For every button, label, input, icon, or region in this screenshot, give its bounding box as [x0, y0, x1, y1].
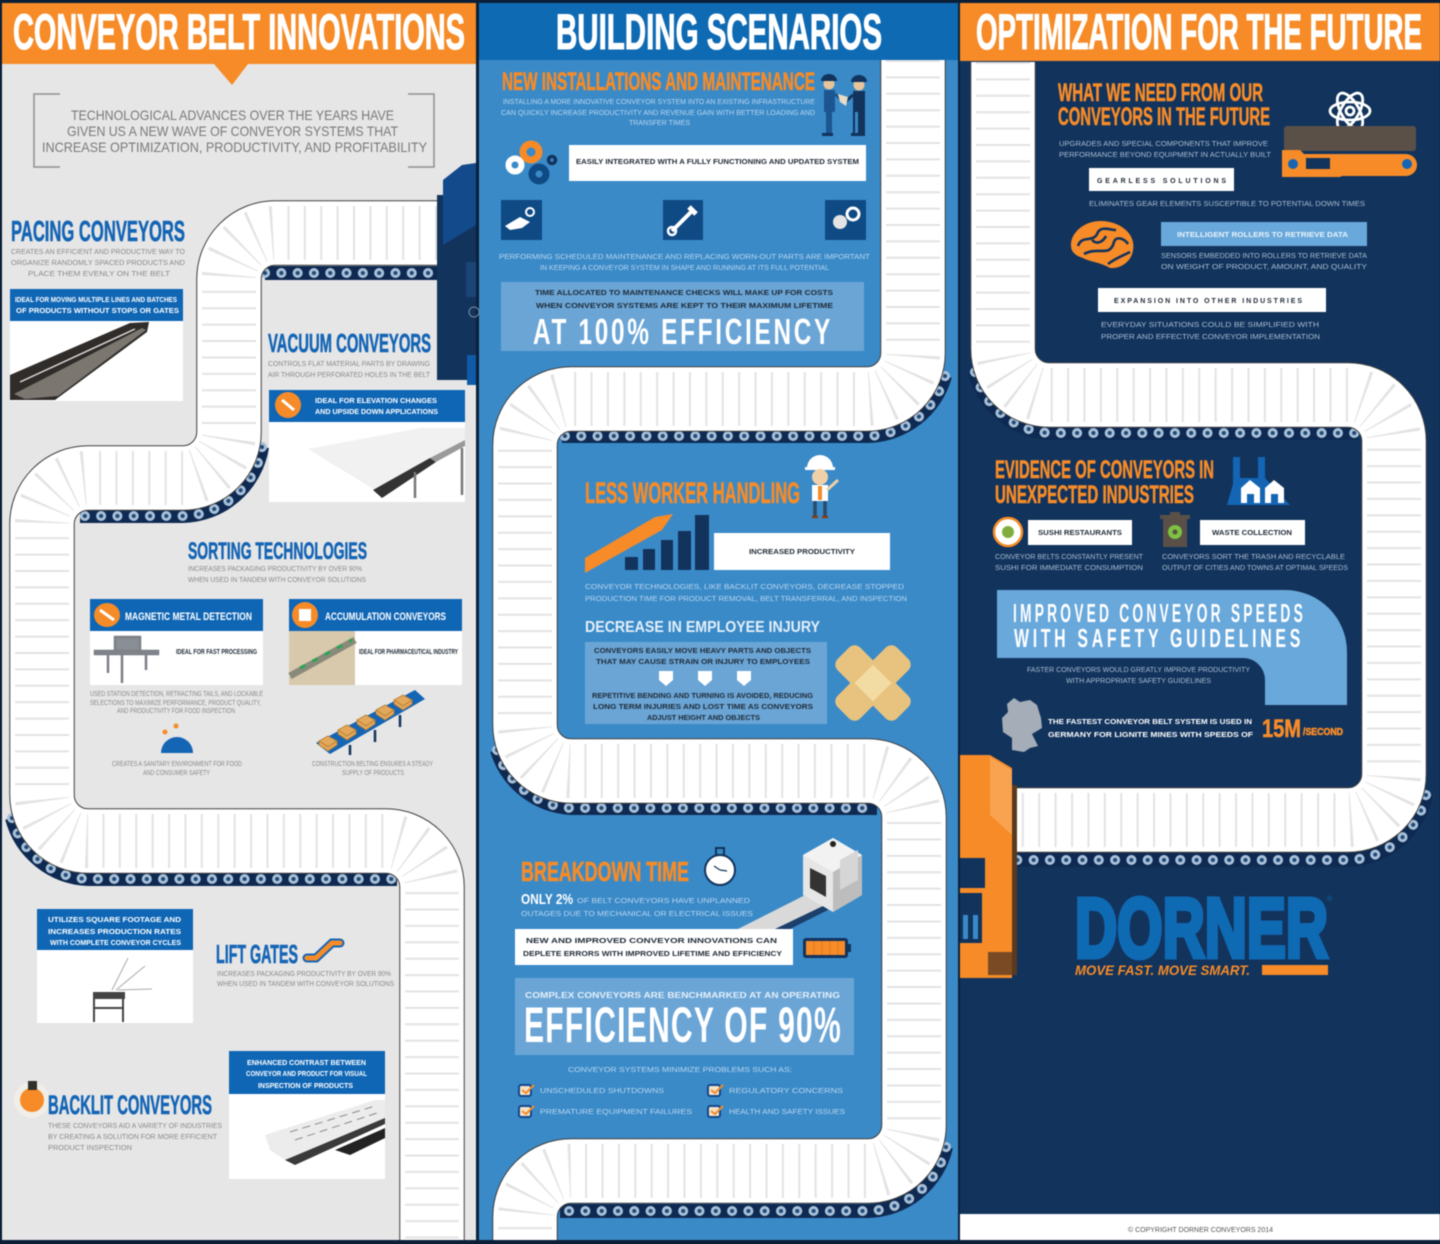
icon: oil can: [501, 200, 542, 240]
section: breakdown time: OF BELT CONVEYORS HAVE UNPLANNED: [577, 898, 750, 905]
text: sanitary caption: AND CONSUMER SAFETY: [143, 770, 210, 777]
callout: injury box: LONG TERM INJURIES AND LOST TIME AS CONVEYORS: [593, 704, 813, 711]
text: belting caption: CONSTRUCTION BELTING ENSURES A STEADY: [312, 761, 433, 768]
icon: sushi plate: [994, 518, 1022, 546]
image: pacing conveyor belt: [10, 322, 149, 400]
card: accumulation conveyors: IDEAL FOR PHARMACEUTICAL INDUSTRY: [359, 649, 458, 656]
chart: productivity bars with arrow: [585, 514, 709, 573]
section: new installations and maintenance: PERFORMING SCHEDULED MAINTENANCE AND REPLACING WORN-OUT PARTS ARE IMPORTANT: [499, 254, 871, 261]
section: sorting technologies: [90, 538, 462, 777]
section: vacuum conveyors: IDEAL FOR ELEVATION CHANGES: [315, 398, 437, 405]
section: lift gates: INCREASES PACKAGING PRODUCTIVITY BY OVER 90%: [217, 971, 391, 978]
callout: 100% efficiency: WHEN CONVEYOR SYSTEMS ARE KEPT TO THEIR MAXIMUM LIFETIME: [536, 303, 833, 310]
footer: copyright: [960, 1214, 1440, 1240]
logo: dorner: MOVE FAST. MOVE SMART.: [1075, 962, 1250, 978]
callout: 100% efficiency: [501, 282, 864, 352]
section: what we need from our conveyors: SENSORS EMBEDDED INTO ROLLERS TO RETRIEVE DATA: [1161, 253, 1367, 260]
callout: injury box: ADJUST HEIGHT AND OBJECTS: [647, 715, 760, 722]
intro bracketed text: INCREASE OPTIMIZATION, PRODUCTIVITY, AND PROFITABILITY: [42, 139, 428, 155]
text: sanitary caption: CREATES A SANITARY ENVIRONMENT FOR FOOD: [112, 761, 242, 768]
icon: atom: [1330, 89, 1370, 133]
callout: sushi restaurants: SUSHI RESTAURANTS: [1038, 530, 1122, 537]
section: what we need from our conveyors: PROPER AND EFFECTIVE CONVEYOR IMPLEMENTATION: [1101, 334, 1320, 341]
section: what we need from our conveyors: PERFORMANCE BEYOND EQUIPMENT IN ACTUALLY BUILT: [1059, 152, 1272, 159]
callout: injury box: CONVEYORS EASILY MOVE HEAVY PARTS AND OBJECTS: [594, 648, 811, 655]
callout: new and improved innovations: [515, 929, 793, 965]
callout: injury box: [585, 642, 827, 724]
icon: orange conveyor device: [1282, 126, 1417, 177]
conveyor belt: panel 1: [12, 233, 437, 1240]
icon: recycling bin: [1160, 512, 1190, 547]
section: lift gates: INCREASES PRODUCTION RATES: [48, 929, 181, 936]
section: less worker handling: LESS WORKER HANDLING: [585, 477, 800, 510]
callout: gearless solutions: GEARLESS SOLUTIONS: [1097, 178, 1226, 185]
section: backlit conveyors: BY CREATING A SOLUTION FOR MORE EFFICIENT: [48, 1134, 218, 1141]
callout: waste collection: [1200, 520, 1305, 545]
icon: machine gears: [825, 200, 866, 240]
section: vacuum conveyors: [268, 328, 465, 502]
section: backlit conveyors: [14, 1051, 385, 1179]
fact: fastest belt in germany: /SECOND: [1303, 727, 1343, 738]
footer: copyright: © COPYRIGHT DORNER CONVEYORS 2014: [1128, 1226, 1273, 1234]
header: conveyor belt innovations: [2, 3, 476, 85]
section: what we need from our conveyors: EVERYDAY SITUATIONS COULD BE SIMPLIFIED WITH: [1101, 322, 1319, 329]
section: new installations and maintenance: [499, 68, 871, 352]
callout: gearless solutions: [1089, 168, 1234, 191]
section: lift gates: WITH COMPLETE CONVEYOR CYCLES: [50, 940, 181, 947]
icon: light bulb: [14, 1081, 50, 1118]
card: magnetic metal detection: MAGNETIC METAL DETECTION: [125, 611, 252, 623]
section: unexpected industries: CONVEYOR BELTS CONSTANTLY PRESENT: [995, 554, 1144, 561]
section: pacing conveyors: PLACE THEM EVENLY ON THE BELT: [28, 271, 171, 278]
intro bracketed text: TECHNOLOGICAL ADVANCES OVER THE YEARS HAVE: [71, 107, 394, 123]
icon: sanitary dome: [161, 724, 193, 753]
panel: optimization for the future: FASTER CONVEYORS WOULD GREATLY IMPROVE PRODUCTIVITY: [1027, 667, 1250, 674]
section: what we need from our conveyors: WHAT WE NEED FROM OUR: [1058, 79, 1263, 107]
section: what we need from our conveyors: ON WEIGHT OF PRODUCT, AMOUNT, AND QUALITY: [1161, 264, 1367, 271]
section: unexpected industries: EVIDENCE OF CONVEYORS IN: [995, 456, 1214, 484]
section: new installations and maintenance: NEW INSTALLATIONS AND MAINTENANCE: [502, 68, 815, 96]
icon: brain: [1071, 221, 1133, 268]
image: vacuum conveyor: [308, 428, 465, 498]
section: lift gates: WHEN USED IN TANDEM WITH CONVEYOR SOLUTIONS: [217, 981, 394, 988]
fact: fastest belt in germany: 15M: [1262, 715, 1301, 743]
text: detection description: AND PRODUCTIVITY FOR FOOD INSPECTION: [117, 708, 235, 715]
section: sorting technologies: WHEN USED IN TANDEM WITH CONVEYOR SOLUTIONS: [188, 577, 366, 584]
section: breakdown time: OUTAGES DUE TO MECHANICAL OR ELECTRICAL ISSUES: [521, 911, 753, 918]
callout: new and improved innovations: NEW AND IMPROVED CONVEYOR INNOVATIONS CAN: [526, 938, 777, 945]
card: magnetic metal detection: IDEAL FOR FAST PROCESSING: [176, 649, 257, 656]
section: vacuum conveyors: VACUUM CONVEYORS: [268, 328, 431, 358]
section: what we need from our conveyors: ELIMINATES GEAR ELEMENTS SUSCEPTIBLE TO POTENTIAL DOWN TIMES: [1089, 201, 1365, 208]
section: backlit conveyors: ENHANCED CONTRAST BETWEEN: [247, 1060, 366, 1067]
checklist: problems minimized: PREMATURE EQUIPMENT FAILURES: [540, 1109, 692, 1116]
callout: efficiency of 90%: EFFICIENCY OF 90%: [524, 997, 842, 1053]
section: new installations and maintenance: INSTALLING A MORE INNOVATIVE CONVEYOR SYSTEM INTO AN EXISTING INFRASTRUCTURE: [503, 99, 815, 106]
logo: dorner: [1075, 881, 1333, 978]
section: unexpected industries: SUSHI FOR IMMEDIATE CONSUMPTION: [995, 565, 1143, 572]
icon: bandage cross: [832, 642, 914, 724]
callout: efficiency of 90%: COMPLEX CONVEYORS ARE BENCHMARKED AT AN OPERATING: [525, 990, 840, 1000]
icon: stopwatch: [705, 848, 735, 885]
icon: escalator: [307, 943, 340, 958]
callout: intelligent rollers: INTELLIGENT ROLLERS TO RETRIEVE DATA: [1177, 230, 1349, 239]
section: breakdown time: CONVEYOR SYSTEMS MINIMIZE PROBLEMS SUCH AS:: [568, 1067, 792, 1074]
section: lift gates: LIFT GATES: [216, 939, 298, 969]
section: vacuum conveyors: AND UPSIDE DOWN APPLICATIONS: [315, 409, 438, 416]
callout: easily integrated: EASILY INTEGRATED WITH A FULLY FUNCTIONING AND UPDATED SYSTEM: [576, 159, 859, 166]
section: pacing conveyors: PACING CONVEYORS: [11, 216, 185, 248]
section: less worker handling: [585, 455, 914, 724]
section: backlit conveyors: CONVEYOR AND PRODUCT FOR VISUAL: [246, 1071, 368, 1078]
section: lift gates: [37, 909, 394, 1023]
callout: waste collection: WASTE COLLECTION: [1212, 530, 1292, 537]
section: backlit conveyors: PRODUCT INSPECTION: [48, 1145, 132, 1152]
card: accumulation conveyors: [289, 599, 462, 685]
checklist: problems minimized: HEALTH AND SAFETY ISSUES: [729, 1109, 845, 1116]
icon: map of germany: [1002, 698, 1042, 752]
callout: injury box: THAT MAY CAUSE STRAIN OR INJURY TO EMPLOYEES: [596, 659, 810, 666]
callout: increased productivity: [714, 533, 890, 570]
card: accumulation conveyors: ACCUMULATION CONVEYORS: [325, 611, 446, 623]
icon: conveyor with boxes: [316, 690, 425, 755]
icon: two workers: [821, 74, 867, 136]
section: unexpected industries: CONVEYORS SORT THE TRASH AND RECYCLABLE: [1162, 554, 1345, 561]
section: less worker handling: CONVEYOR TECHNOLOGIES, LIKE BACKLIT CONVEYORS, DECREASE STOPPED: [585, 584, 904, 591]
intro bracketed text: [34, 94, 434, 167]
icon: engineer with hard hat: [805, 455, 838, 517]
header: building scenarios: [479, 3, 958, 60]
intro bracketed text: GIVEN US A NEW WAVE OF CONVEYOR SYSTEMS THAT: [67, 123, 398, 139]
callout: easily integrated: [569, 145, 866, 181]
text: detection description: USED STATION DETECTION, RETRACTING TAILS, AND LOCKABLE: [90, 691, 263, 698]
callout: intelligent rollers: [1161, 222, 1367, 246]
image: lift gate: [94, 958, 152, 1022]
icon: gears: [508, 144, 556, 181]
callout: sushi restaurants: [1028, 520, 1132, 545]
icon: wrench: [663, 200, 703, 240]
text: detection description: SELECTIONS TO MAXIMIZE PERFORMANCE, PRODUCT QUALITY,: [90, 700, 261, 707]
section: backlit conveyors: INSPECTION OF PRODUCTS: [258, 1083, 353, 1090]
illustration: inspection machine: [738, 838, 862, 929]
section: lift gates: UTILIZES SQUARE FOOTAGE AND: [48, 917, 181, 924]
section: breakdown time: BREAKDOWN TIME: [521, 856, 689, 887]
section: backlit conveyors: THESE CONVEYORS AID A VARIETY OF INDUSTRIES: [48, 1123, 222, 1130]
section: breakdown time: ONLY 2%: [521, 891, 573, 908]
section: pacing conveyors: OF PRODUCTS WITHOUT STOPS OR GATES: [16, 308, 179, 315]
callout: new and improved innovations: DEPLETE ERRORS WITH IMPROVED LIFETIME AND EFFICIENCY: [523, 951, 782, 958]
panel: conveyor belt innovations: [2, 3, 479, 1240]
panel: optimization for the future: WITH APPROPRIATE SAFETY GUIDELINES: [1066, 678, 1211, 685]
section: unexpected industries: [994, 456, 1348, 572]
section: less worker handling: DECREASE IN EMPLOYEE INJURY: [585, 619, 820, 636]
conveyor belt: panel 3: [975, 62, 1426, 860]
callout: expansion into other industries: [1098, 288, 1326, 312]
machine: blue conveyor housing: [437, 163, 479, 385]
section: what we need from our conveyors: UPGRADES AND SPECIAL COMPONENTS THAT IMPROVE: [1059, 141, 1268, 148]
text: belting caption: [312, 761, 433, 777]
callout: 100% efficiency: TIME ALLOCATED TO MAINTENANCE CHECKS WILL MAKE UP FOR COSTS: [535, 290, 833, 297]
conveyor belt: panel 2: [497, 60, 946, 1240]
section: backlit conveyors: BACKLIT CONVEYORS: [48, 1090, 212, 1120]
section: unexpected industries: OUTPUT OF CITIES AND TOWNS AT OPTIMAL SPEEDS: [1162, 565, 1348, 572]
logo: dorner: ®: [1327, 895, 1333, 903]
panel: building scenarios: [479, 3, 958, 1240]
section: pacing conveyors: CREATES AN EFFICIENT AND PRODUCTIVE WAY TO: [11, 249, 186, 256]
callout: 100% efficiency: AT 100% EFFICIENCY: [533, 311, 833, 352]
text: belting caption: SUPPLY OF PRODUCTS: [342, 770, 404, 777]
section: sorting technologies: INCREASES PACKAGING PRODUCTIVITY BY OVER 90%: [188, 566, 362, 573]
logo: dorner: DORNER: [1075, 881, 1328, 975]
checklist: problems minimized: [519, 1085, 845, 1117]
section: new installations and maintenance: CAN QUICKLY INCREASE PRODUCTIVITY AND REVENUE GAIN WITH BETTER LOADING AND: [501, 110, 815, 117]
section: what we need from our conveyors: [1058, 79, 1417, 341]
callout: improved conveyor speeds: [997, 590, 1347, 705]
section: new installations and maintenance: IN KEEPING A CONVEYOR SYSTEM IN SHAPE AND RUNNING AT ITS FULL POTENTIAL: [540, 265, 829, 272]
section: vacuum conveyors: AIR THROUGH PERFORATED HOLES IN THE BELT: [268, 372, 431, 379]
header: conveyor belt innovations: CONVEYOR BELT INNOVATIONS: [13, 4, 465, 60]
section: unexpected industries: UNEXPECTED INDUSTRIES: [995, 481, 1194, 509]
card: magnetic metal detection: [90, 599, 263, 685]
fact: fastest belt in germany: GERMANY FOR LIGNITE MINES WITH SPEEDS OF: [1048, 732, 1254, 739]
section: pacing conveyors: ORGANIZE RANDOMLY SPACED PRODUCTS AND: [11, 260, 185, 267]
image: backlit conveyor: [265, 1100, 385, 1165]
checklist: problems minimized: REGULATORY CONCERNS: [729, 1088, 843, 1095]
icon: battery: [803, 938, 851, 958]
fact: fastest belt in germany: [1002, 698, 1343, 752]
text: detection description: [90, 691, 263, 715]
section: pacing conveyors: IDEAL FOR MOVING MULTIPLE LINES AND BATCHES: [15, 297, 177, 304]
section: new installations and maintenance: TRANSFER TIMES: [629, 120, 690, 127]
checklist: problems minimized: UNSCHEDULED SHUTDOWNS: [540, 1088, 664, 1095]
text: sanitary caption: [112, 761, 242, 777]
callout: increased productivity: INCREASED PRODUCTIVITY: [749, 549, 855, 556]
section: sorting technologies: SORTING TECHNOLOGIES: [188, 538, 367, 565]
fact: fastest belt in germany: THE FASTEST CONVEYOR BELT SYSTEM IS USED IN: [1048, 719, 1252, 726]
section: breakdown time: [515, 838, 862, 1117]
panel: optimization for the future: [960, 3, 1440, 1240]
callout: efficiency of 90%: [515, 978, 854, 1055]
callout: injury box: REPETITIVE BENDING AND TURNING IS AVOIDED, REDUCING: [592, 693, 814, 700]
section: pacing conveyors: [10, 216, 186, 401]
section: vacuum conveyors: CONTROLS FLAT MATERIAL PARTS BY DRAWING: [268, 361, 430, 368]
machine: orange conveyor housing: [960, 755, 1017, 978]
section: what we need from our conveyors: CONVEYORS IN THE FUTURE: [1058, 103, 1270, 131]
section: less worker handling: PRODUCTION TIME FOR PRODUCT REMOVAL, BELT TRANSFERRAL, AND INSPECTION: [585, 596, 907, 603]
header: building scenarios: BUILDING SCENARIOS: [556, 4, 882, 60]
callout: expansion into other industries: EXPANSION INTO OTHER INDUSTRIES: [1114, 298, 1302, 305]
icon: factory: [1227, 457, 1290, 505]
